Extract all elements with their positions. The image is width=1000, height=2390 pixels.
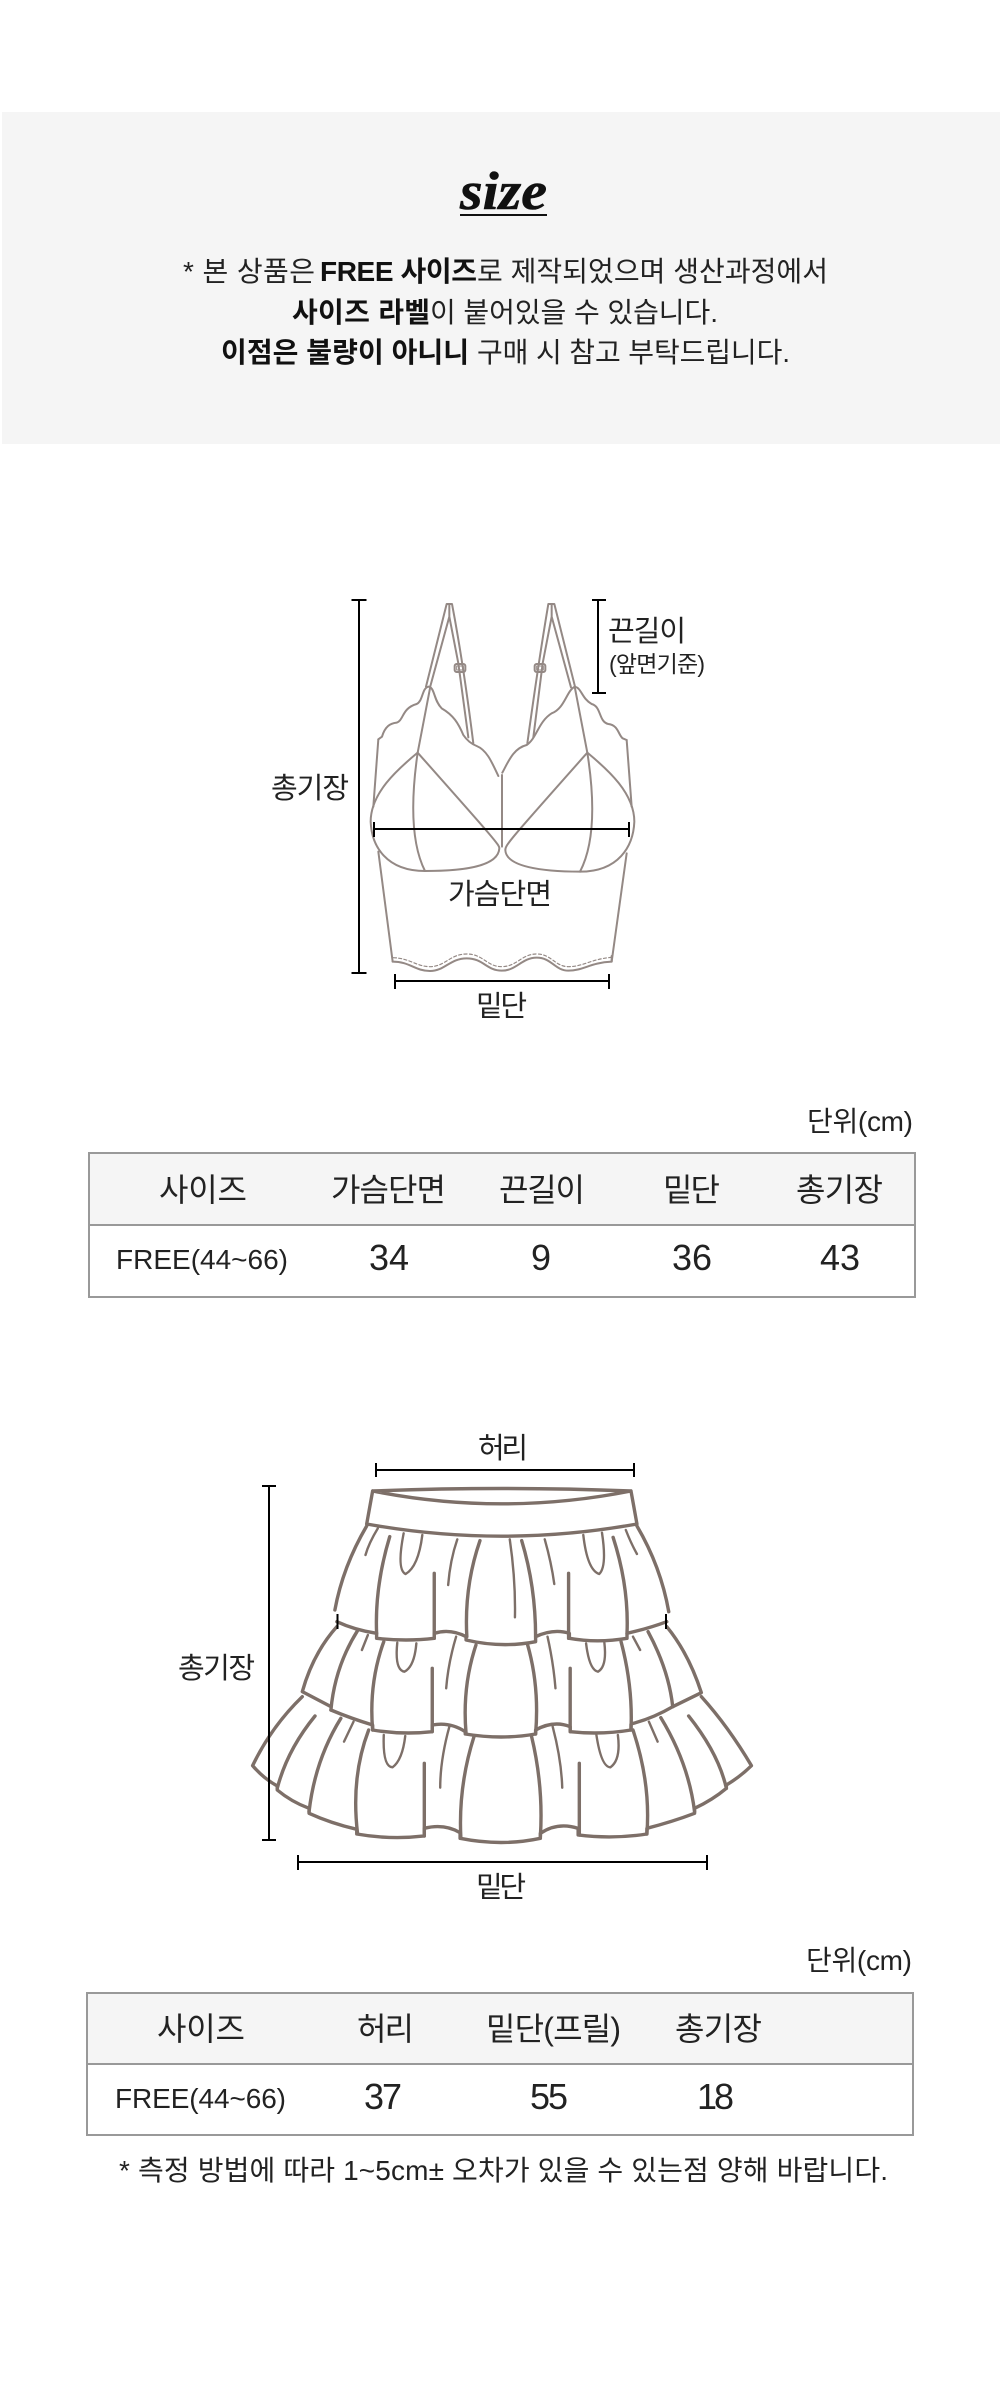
table header: top: 사이즈 — [159, 1172, 247, 1208]
table row: skirt values: 18 — [697, 2076, 734, 2117]
table header: skirt: 사이즈 — [157, 2011, 245, 2047]
table header: top: 가슴단면 — [331, 1172, 446, 1208]
table header: top: 밑단 — [663, 1172, 720, 1208]
table header: top: 총기장 — [796, 1172, 883, 1208]
measure lines: skirt — [262, 1463, 707, 1870]
diagram: skirt measurements — [178, 1432, 751, 1904]
table row: skirt values: 37 — [364, 2076, 402, 2117]
label: hem: 밑단 — [476, 990, 527, 1023]
table header: skirt — [157, 2011, 762, 2047]
table row: top values — [116, 1237, 860, 1278]
unit label: top table: 단위(cm) — [807, 1106, 913, 1137]
table header: top: 끈길이 — [499, 1172, 585, 1208]
table row: top values: 43 — [820, 1237, 860, 1278]
illustration: tiered skirt outline — [253, 1488, 751, 1842]
measure lines: camisole — [352, 600, 629, 989]
title: size: size — [459, 161, 547, 221]
label: strap length: 끈길이 — [608, 615, 686, 648]
table row: top values: 34 — [369, 1237, 409, 1278]
label: total length: 총기장 — [271, 773, 349, 805]
panel: size intro — [2, 112, 1000, 444]
table header: skirt: 밑단(프릴) — [486, 2011, 621, 2047]
label: chest width: 가슴단면 — [448, 878, 552, 911]
note: measurement tolerance: * 측정 방법에 따라 1~5cm± 오차가 있을 수 있는점 양해 바랍니다. — [119, 2155, 888, 2186]
table row: skirt values — [115, 2076, 734, 2117]
unit label: skirt table: 단위(cm) — [806, 1945, 912, 1976]
text block: size notice: 로 제작되었으며 생산과정에서 — [477, 256, 828, 287]
table: skirt sizes — [87, 1993, 913, 2135]
text block: size notice: 이점은 불량이 아니니 — [221, 337, 469, 368]
table row: top values: 9 — [531, 1237, 551, 1278]
text block: size notice: 이 붙어있을 수 있습니다. — [430, 297, 718, 328]
table header: top — [159, 1172, 883, 1208]
text block: size notice: * 본 상품은 — [183, 256, 315, 287]
table row: skirt values: FREE(44~66) — [115, 2083, 286, 2114]
text block: size notice: 구매 시 참고 부탁드립니다. — [477, 337, 790, 368]
text block: size notice: FREE 사이즈 — [320, 256, 477, 287]
label: skirt total length: 총기장 — [178, 1653, 255, 1685]
diagram: camisole top measurements — [271, 600, 705, 1023]
illustration: camisole outline — [371, 604, 634, 971]
table row: top values: 36 — [672, 1237, 712, 1278]
table row: skirt values: 55 — [530, 2076, 568, 2117]
table header: skirt: 총기장 — [675, 2011, 762, 2047]
label: front basis: (앞면기준) — [609, 651, 705, 677]
label: skirt hem: 밑단 — [476, 1871, 526, 1904]
table: top sizes — [89, 1153, 915, 1297]
table row: top values: FREE(44~66) — [116, 1244, 288, 1275]
table header: skirt: 허리 — [357, 2011, 414, 2047]
text block: size notice — [183, 256, 828, 368]
label: waist: 허리 — [478, 1432, 528, 1465]
text block: size notice: 사이즈 라벨 — [292, 297, 430, 328]
